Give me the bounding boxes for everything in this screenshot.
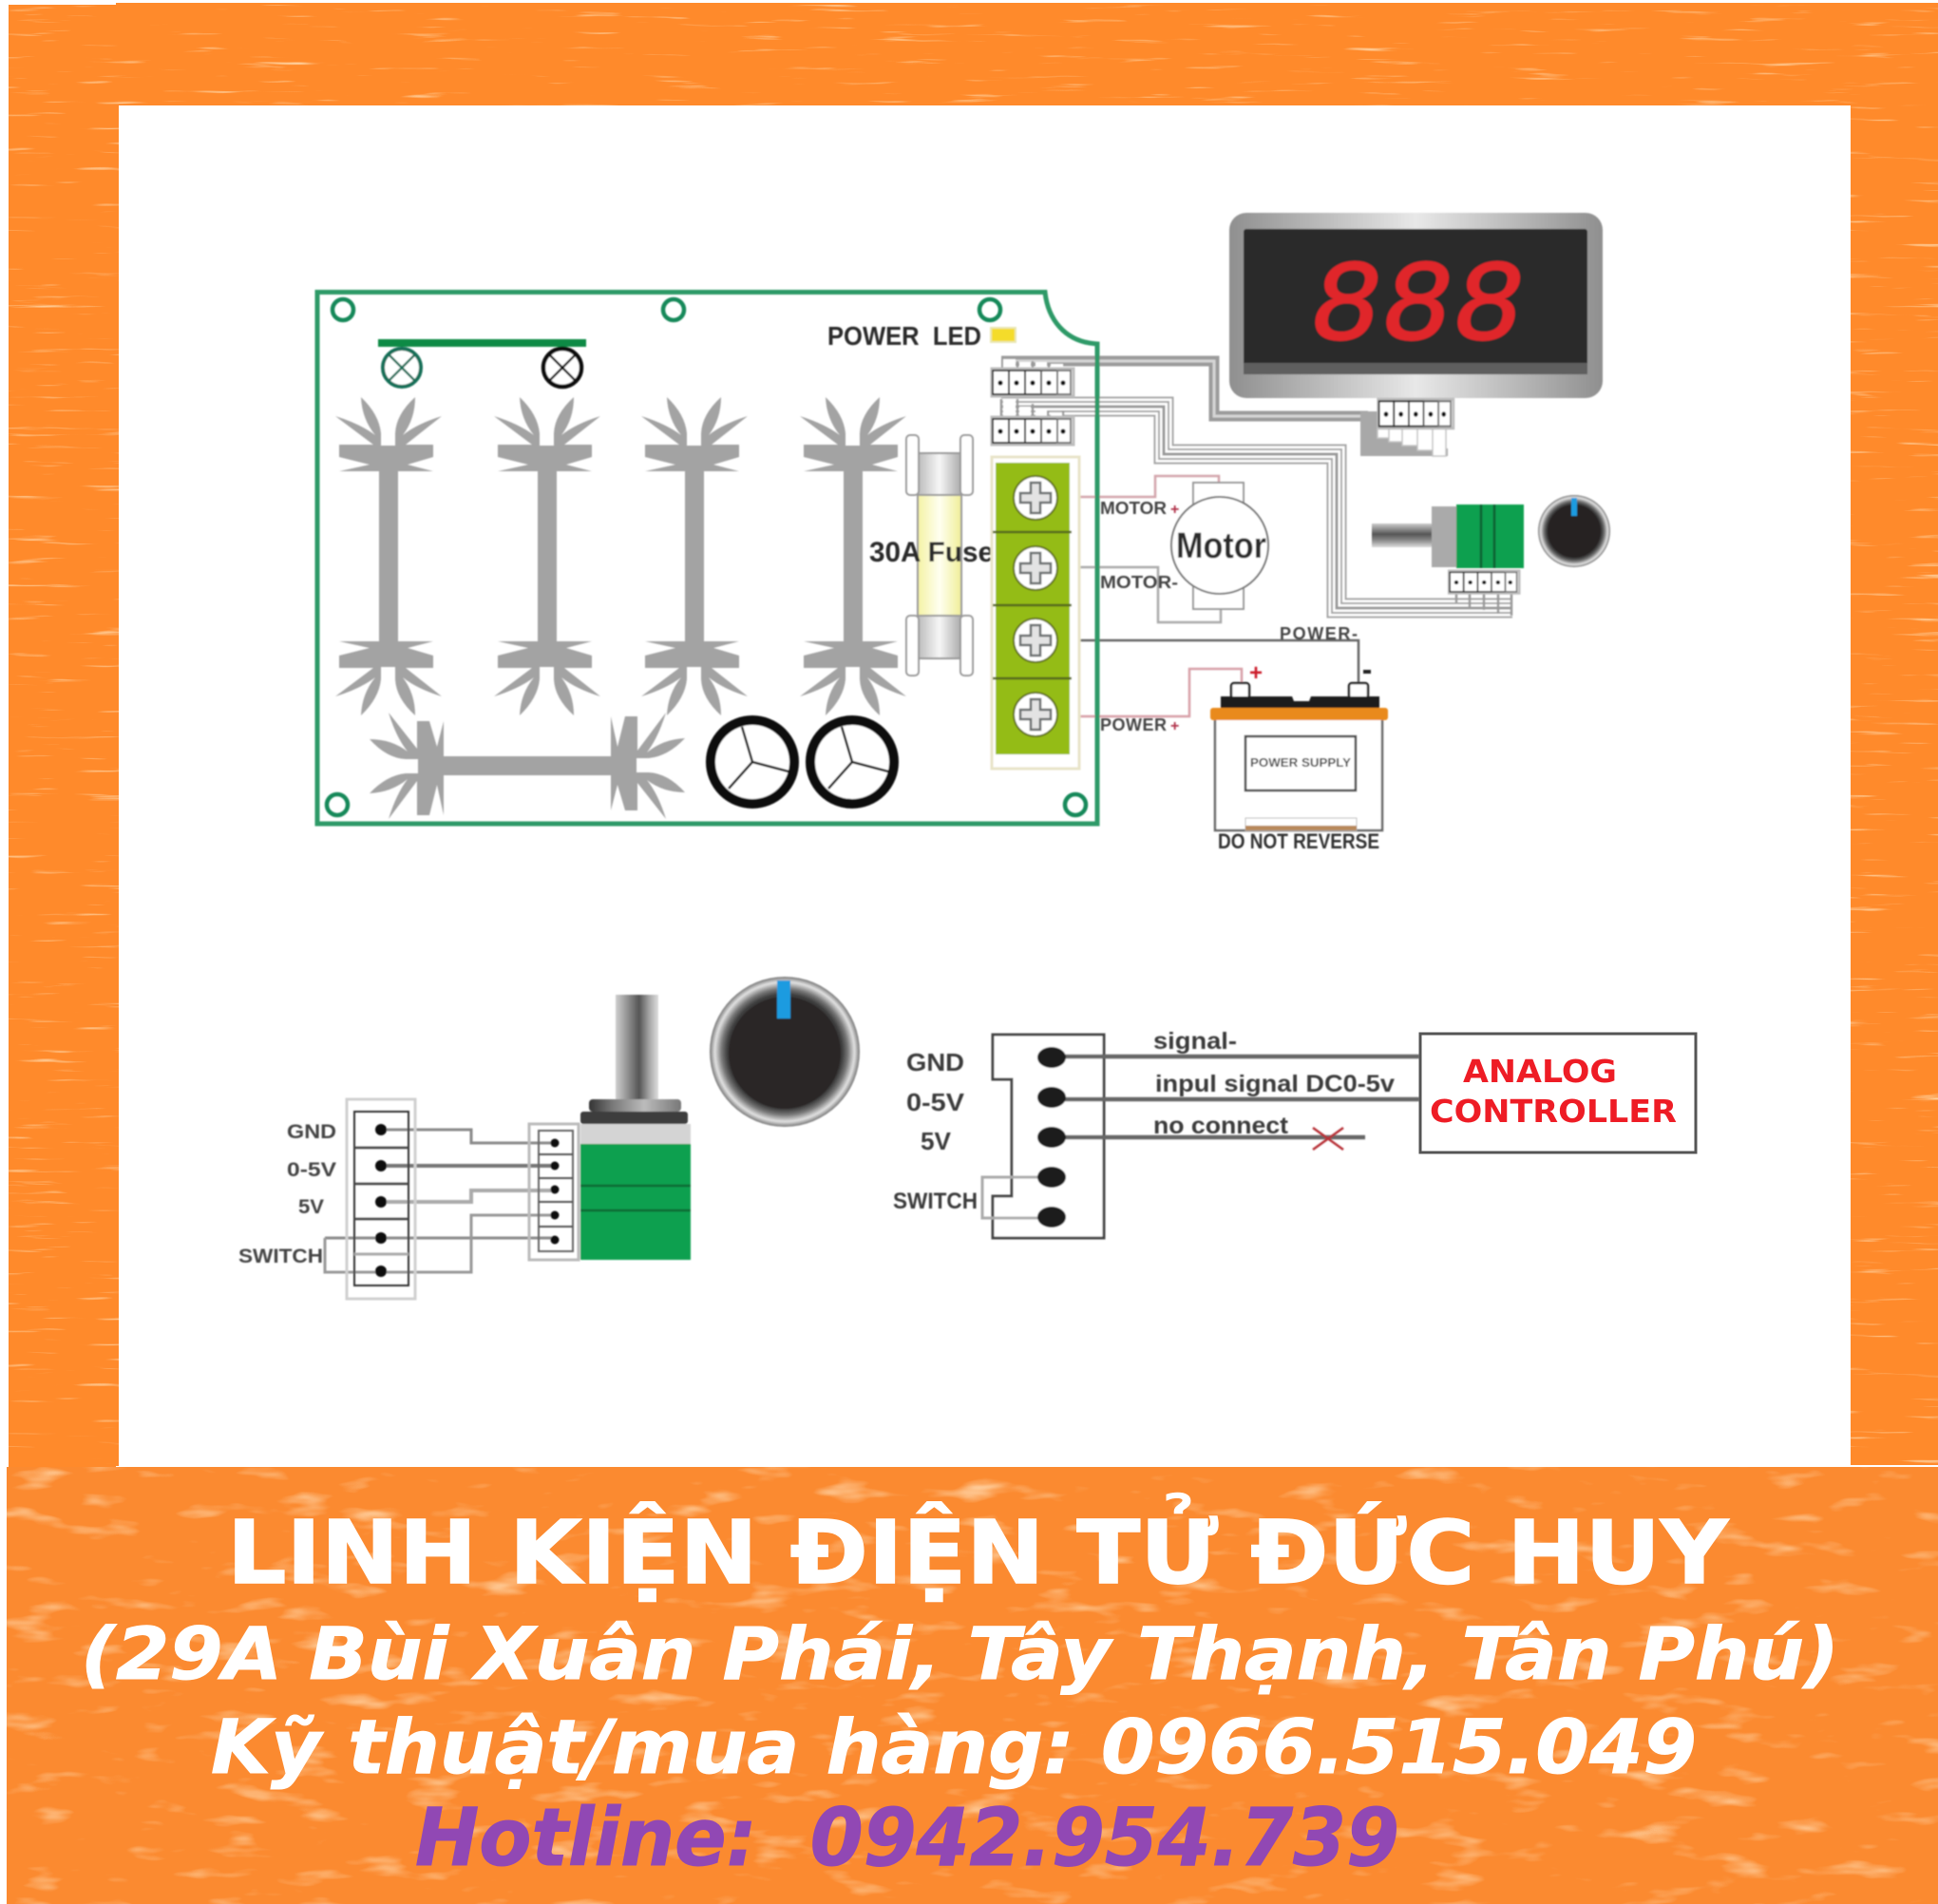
left pin labels: 0-5V <box>287 1159 336 1181</box>
analog controller box <box>1420 1034 1696 1152</box>
left connector block <box>347 1099 415 1299</box>
battery <box>1210 660 1388 830</box>
terminal block <box>992 457 1079 769</box>
motor plus sign: + <box>1170 502 1179 518</box>
signal labels: no connect <box>1153 1113 1289 1139</box>
power plus label: POWER <box>1100 715 1167 734</box>
wiring diagram <box>238 213 1610 1299</box>
signal labels: inpul signal DC0-5v <box>1155 1071 1395 1097</box>
power LED indicator <box>991 328 1016 342</box>
analog signal wires <box>1052 1057 1419 1137</box>
fuse label: 30A Fuse <box>869 537 994 568</box>
small potentiometer <box>1372 505 1524 568</box>
analog pin labels <box>893 1048 978 1214</box>
analog controller box: CONTROLLER <box>1430 1093 1677 1130</box>
icon: crossed lamp black <box>543 349 581 387</box>
analog pin labels: GND <box>906 1048 964 1076</box>
board mounting holes <box>327 299 1086 815</box>
fuse <box>906 435 973 676</box>
battery: POWER SUPPLY <box>1250 755 1351 770</box>
white diagram panel <box>119 105 1851 1466</box>
LED display: 888 <box>1311 242 1523 374</box>
battery warning label: DO NOT REVERSE <box>1218 829 1379 853</box>
analog pin labels: 5V <box>921 1127 952 1155</box>
left pin labels: SWITCH <box>238 1246 323 1267</box>
no connect cross <box>1313 1128 1343 1150</box>
shop name: LINH KIỆN ĐIỆN TỬ ĐỨC HUY <box>227 1492 1729 1604</box>
power plus sign: + <box>1170 718 1179 734</box>
small knob <box>1538 495 1610 567</box>
analog controller box: ANALOG <box>1463 1053 1617 1090</box>
left pin labels <box>238 1121 336 1267</box>
connector: display header on board <box>992 356 1074 396</box>
power LED label: POWER LED <box>827 321 981 351</box>
analog connector pins <box>1037 1047 1066 1228</box>
signal labels: signal- <box>1153 1028 1237 1055</box>
heat sink tracks <box>335 397 906 819</box>
motor label minus: MOTOR- <box>1100 573 1178 592</box>
hotline: Hotline: 0942.954.739 <box>415 1791 1399 1884</box>
icon: capacitor wheels <box>711 720 894 804</box>
left pin labels: 5V <box>298 1196 324 1218</box>
analog pin labels: 0-5V <box>906 1088 965 1116</box>
circuit board outline <box>317 293 1097 824</box>
large potentiometer <box>580 995 691 1260</box>
connector: display header <box>1378 399 1454 428</box>
left pin labels: GND <box>287 1121 336 1143</box>
connector: potentiometer header on board <box>992 399 1074 445</box>
connector: small potentiometer header <box>1449 571 1519 593</box>
analog pin labels: SWITCH <box>893 1189 978 1214</box>
icon: crossed lamp green <box>383 349 421 387</box>
motor label plus: MOTOR <box>1100 499 1167 518</box>
motor: Motor <box>1176 526 1266 566</box>
green bar <box>378 339 586 347</box>
wire bundle: controller to potentiometer <box>1001 407 1512 616</box>
analog connector <box>982 1035 1104 1238</box>
LED display <box>1229 213 1603 398</box>
potentiometer connector block <box>529 1124 579 1260</box>
battery: + <box>1249 660 1263 686</box>
shop address: (29A Bùi Xuân Phái, Tây Thạnh, Tân Phú) <box>81 1611 1839 1696</box>
motor and power wires <box>1036 476 1358 716</box>
large knob <box>710 977 860 1127</box>
signal labels <box>1153 1028 1395 1139</box>
technical contact: Kỹ thuật/mua hàng: 0966.515.049 <box>211 1705 1697 1791</box>
potentiometer wiring <box>325 1130 555 1272</box>
power minus label: POWER- <box>1280 624 1358 643</box>
wire bundle: controller to display <box>1001 361 1448 456</box>
motor <box>1171 483 1268 609</box>
